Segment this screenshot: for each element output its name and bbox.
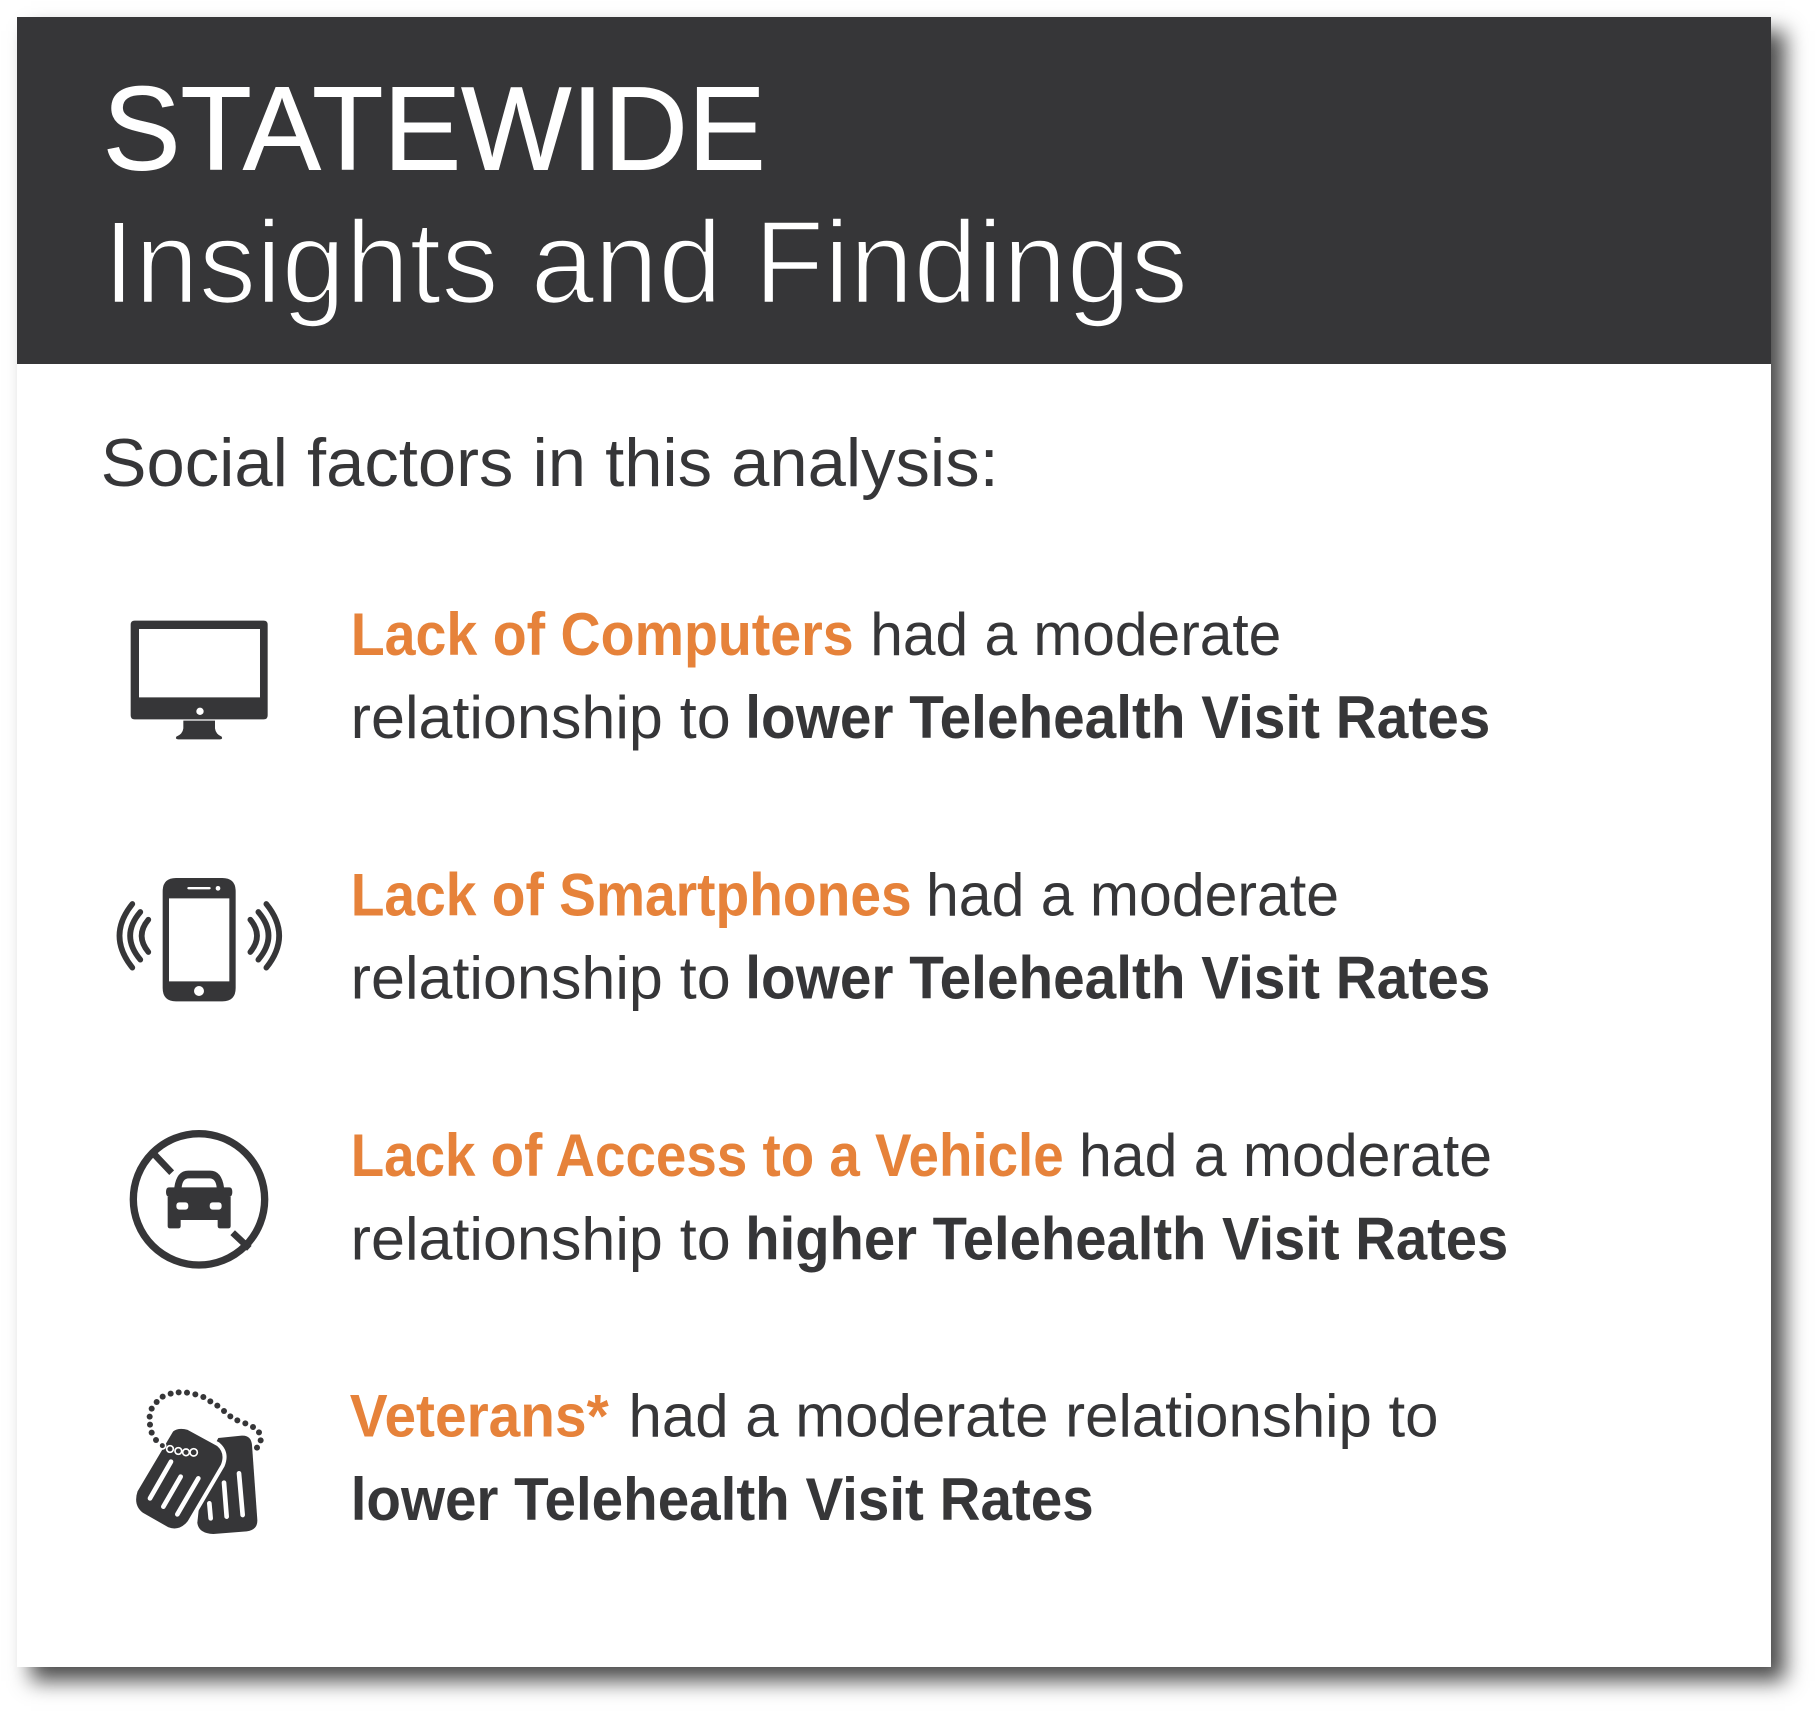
text: veterans [350, 1383, 1439, 1533]
text: lack of access to a vehicle: higher Telehealth Visit Rates [745, 1205, 1508, 1272]
header band [17, 17, 1771, 364]
text: lack of smartphones [351, 862, 1490, 1012]
text: lack of access to a vehicle: relationship to [351, 1205, 731, 1272]
text: lack of smartphones: Lack of Smartphones [351, 862, 912, 929]
text: veterans: Veterans* [350, 1383, 609, 1450]
text: lack of computers: Lack of Computers [351, 601, 854, 668]
text: lack of computers: lower Telehealth Visit Rates [745, 684, 1490, 751]
icon: computer monitor [131, 621, 268, 739]
text: lack of access to a vehicle: Lack of Access to a Vehicle [351, 1122, 1064, 1189]
text: lack of smartphones: had a moderate [926, 862, 1339, 929]
text: lack of smartphones: relationship to [351, 945, 731, 1012]
text: veterans: had a moderate relationship to [628, 1383, 1438, 1450]
text: lack of smartphones: lower Telehealth Visit Rates [745, 945, 1490, 1012]
text: veterans: lower Telehealth Visit Rates [351, 1466, 1094, 1533]
text: lack of access to a vehicle [351, 1122, 1508, 1272]
title: STATEWIDE [103, 62, 766, 195]
icon: dog tags [134, 1389, 264, 1534]
text: lack of access to a vehicle: had a moderate [1079, 1122, 1492, 1189]
text: lack of computers [351, 601, 1490, 751]
icon: no vehicle [133, 1134, 265, 1265]
text: lack of computers: relationship to [351, 684, 731, 751]
title: Insights and Findings [103, 197, 1188, 329]
subheading: Social factors in this analysis: [101, 425, 999, 501]
text: lack of computers: had a moderate [870, 601, 1281, 668]
icon: vibrating smartphone [119, 878, 279, 1001]
title [103, 62, 1188, 329]
